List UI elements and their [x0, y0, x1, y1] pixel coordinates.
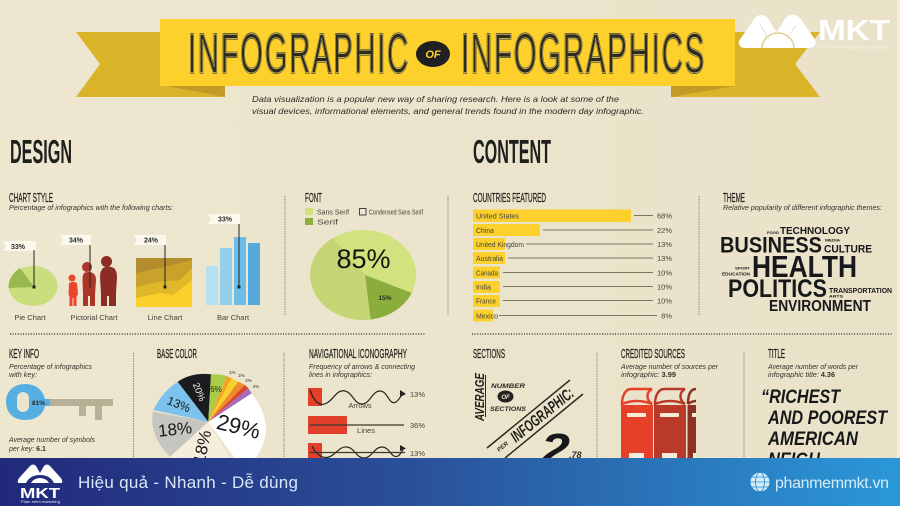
ribbon fold left [165, 86, 225, 97]
panel: credited sources: infographic: 3.99 [621, 370, 676, 379]
footer website: phanmemmkt.vn [775, 475, 889, 492]
base color pie chart: 2% [253, 384, 259, 389]
panel: navigational iconography: Frequency of arrows & connecting [309, 362, 416, 371]
footer logo [18, 464, 62, 504]
pictorial chart [60, 235, 118, 322]
sections typographic graphic: 2 [540, 425, 571, 474]
font legend: Condensed Sans Serif [369, 208, 424, 216]
panel: credited sources: CREDITED SOURCES [621, 346, 685, 361]
MKT logo top right: Phần mềm Marketing đa kênh [818, 45, 890, 51]
icon: books [621, 389, 696, 459]
word cloud: FOOD [767, 230, 779, 235]
intro text: Data visualization is a popular new way of sharing research. Here is a look at some of the [252, 94, 619, 104]
country labels: India [476, 282, 492, 292]
MKT logo top right [739, 15, 890, 51]
text: CONTENT [473, 133, 551, 170]
base color pie chart: 2% [229, 370, 236, 375]
panel: base color: BASE COLOR [157, 346, 197, 361]
panel: chart style: Percentage of infographics with the following charts: [9, 203, 173, 212]
line chart [134, 235, 192, 322]
panel: countries featured [473, 190, 672, 322]
lines row [308, 416, 425, 435]
main banner [160, 19, 735, 86]
intro text [252, 94, 644, 116]
footer logo: MKT [20, 485, 60, 502]
title word left [188, 22, 410, 84]
line chart: 24% [144, 238, 159, 244]
footer bar [0, 458, 900, 506]
word cloud: ARTS [829, 294, 844, 298]
sections typographic graphic: SECTIONS [490, 407, 526, 413]
country labels: United Kingdom [476, 240, 524, 249]
arrows and lines row: 13% [410, 449, 425, 458]
leader lines [499, 216, 657, 316]
country labels: Mexico [476, 312, 498, 320]
MKT logo top right: MKT [818, 15, 890, 47]
panel: navigational iconography: lines in infographics: [309, 370, 372, 379]
font legend: Sans Serif [317, 208, 350, 216]
word cloud: POLITICS [728, 275, 827, 303]
country labels: Canada [476, 268, 499, 278]
panel: chart style [3, 190, 260, 322]
left ribbon tail [76, 32, 225, 97]
sections typographic graphic [472, 373, 583, 474]
title word right [461, 22, 706, 84]
country labels: China [476, 226, 495, 235]
sample title quote: AMERICAN [767, 428, 859, 450]
font pie chart [310, 230, 416, 320]
country percentages: 68% [657, 212, 672, 220]
word cloud: SPORT [735, 266, 751, 270]
bar chart: Bar Chart [217, 313, 250, 322]
pictorial chart: Pictorial Chart [70, 313, 118, 322]
sample title quote: “RICHEST [761, 386, 842, 408]
arrows row: Arrows [348, 401, 372, 410]
panel: title: infographic title: 4.36 [768, 370, 835, 379]
country percentages: 22% [657, 226, 672, 235]
arrows row: 13% [410, 390, 425, 399]
font legend [305, 208, 424, 226]
panel: key info: Average number of symbols [8, 435, 95, 444]
country percentages: 13% [657, 240, 672, 249]
sections typographic graphic: NUMBER [491, 384, 526, 390]
pie chart: 33% [11, 244, 26, 251]
sections typographic graphic: PER [496, 441, 510, 454]
of badge [416, 41, 450, 67]
base color pie chart: 2% [245, 378, 252, 383]
pie chart: Pie Chart [14, 313, 47, 322]
base color pie chart: 2% [238, 373, 245, 378]
panel: navigational iconography: NAVIGATIONAL ICONOGRAPHY [309, 346, 407, 361]
panel: sections: SECTIONS [473, 346, 505, 361]
country percentages: 10% [657, 296, 672, 306]
sections typographic graphic: AVERAGE [472, 373, 487, 422]
sections typographic graphic: OF [501, 395, 510, 401]
panel: credited sources [620, 346, 718, 459]
right ribbon tail [671, 32, 820, 97]
panel: theme [720, 190, 892, 315]
word cloud [720, 225, 892, 315]
panel: credited sources: Average number of sources per [620, 362, 718, 371]
sections typographic graphic: .78 [569, 450, 582, 460]
panel: navigational iconography [308, 346, 425, 458]
country labels [476, 212, 524, 320]
base color pie chart: 13% [165, 393, 193, 416]
font pie chart: 85% [336, 244, 391, 274]
country percentages [657, 212, 672, 320]
bar chart [206, 214, 260, 322]
panel: key info: Percentage of infographics [9, 362, 92, 371]
footer logo: Phần mềm marketing [21, 500, 60, 504]
panel: font: FONT [305, 190, 322, 205]
bar chart: 33% [218, 216, 233, 224]
word cloud: HEALTH [752, 250, 857, 284]
title word left: INFOGRAPHIC [188, 22, 410, 84]
sections typographic graphic: INFOGRAPHIC: [508, 385, 578, 446]
line chart: Line Chart [148, 313, 183, 322]
country labels: France [476, 296, 496, 306]
base color pie chart: 18% [190, 428, 215, 466]
panel: title: Average number of words per [767, 362, 858, 371]
sample title quote: NEIGH [768, 449, 821, 471]
word cloud: TECHNOLOGY [780, 225, 850, 237]
title word left: INFOGRAPHIC [188, 22, 410, 84]
panel: sections [472, 346, 583, 474]
intro text: visual devices, informational elements, and general trends found in the modern day infographic. [252, 106, 644, 116]
panel: key info: with key: [9, 370, 37, 379]
base color pie chart: 18% [157, 418, 193, 441]
country bars [473, 210, 631, 322]
panel: title [761, 346, 889, 471]
panel: theme: Relative popularity of different infographic themes: [723, 203, 882, 212]
country labels: United States [476, 212, 519, 220]
word cloud: BUSINESS [720, 232, 822, 258]
lines row: Lines [357, 426, 375, 435]
country labels: Australia [476, 254, 504, 263]
word cloud: CULTURE [824, 244, 872, 256]
word cloud: EDUCATION [722, 272, 750, 276]
base color pie chart: 20% [190, 381, 207, 404]
panel: base color [152, 346, 266, 475]
arrows row [308, 388, 425, 410]
lines row: 36% [410, 421, 425, 430]
panel: key info: KEY INFO [9, 346, 39, 361]
country percentages: 10% [657, 282, 672, 292]
ribbon fold right [671, 86, 735, 97]
word cloud: ENVIRONMENT [769, 298, 871, 315]
title banner [76, 19, 820, 97]
font legend: Serif [317, 218, 339, 226]
word cloud: TRANSPORTATION [829, 286, 892, 295]
of badge: OF [425, 49, 441, 61]
panel: theme: THEME [723, 190, 745, 205]
text: DESIGN [10, 133, 72, 170]
panel: title: TITLE [768, 346, 785, 361]
font pie chart: 15% [378, 295, 392, 302]
panel: key info: per key: 6.1 [8, 444, 46, 453]
pie chart [3, 241, 58, 322]
country percentages: 10% [657, 268, 672, 278]
panel: chart style: CHART STYLE [9, 190, 53, 205]
panel: font [305, 190, 424, 320]
country percentages: 8% [661, 312, 672, 320]
icon: globe [750, 472, 770, 492]
panel: countries featured: COUNTRIES FEATURED [473, 190, 546, 205]
footer slogan: Hiệu quả - Nhanh - Dễ dùng [78, 473, 298, 492]
country percentages: 13% [657, 254, 672, 263]
icon: key: 81% [32, 400, 45, 407]
pictorial chart: 34% [69, 238, 84, 244]
word cloud: MEDIA [825, 238, 840, 242]
base color pie chart: 6% [210, 385, 222, 394]
sample title quote [761, 386, 889, 471]
base color pie chart: 29% [214, 409, 263, 444]
panel: key info [6, 346, 113, 453]
base color pie chart [152, 370, 266, 475]
